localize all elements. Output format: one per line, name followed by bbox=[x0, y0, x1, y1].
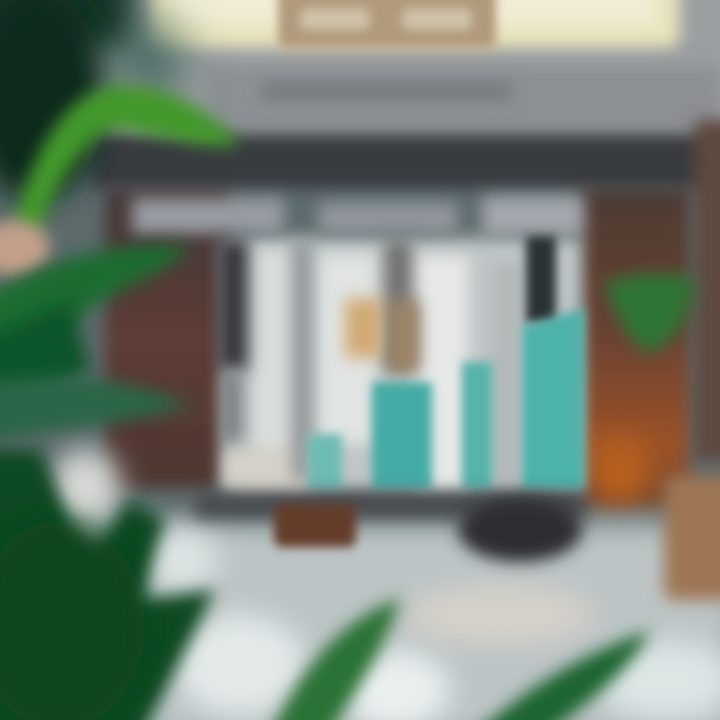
tan accent bbox=[345, 298, 420, 372]
panel header bars bbox=[132, 196, 584, 236]
ceiling: lit panel and grey soffit bbox=[0, 0, 720, 150]
plant: dark upper left foliage bbox=[0, 0, 180, 200]
floor: white cloudy surface bbox=[40, 448, 720, 720]
wood wall: right bbox=[578, 120, 720, 508]
wall plant: right bbox=[605, 273, 695, 352]
white columns bbox=[225, 250, 520, 494]
chart panel: white board with blurred bars bbox=[132, 196, 584, 494]
plant: bottom centre leaf bbox=[270, 598, 400, 720]
wood wall: left bbox=[105, 188, 230, 488]
teal bars bbox=[308, 308, 584, 490]
wooden box: right edge bbox=[664, 475, 720, 600]
plant: mid green leaves left bbox=[0, 244, 190, 445]
base objects: planters under the board bbox=[195, 492, 585, 562]
plant: bottom right leaf bbox=[470, 630, 650, 720]
skin-toned patch behind foliage bbox=[0, 220, 50, 276]
plant: large dark green foreground leaves bbox=[0, 450, 215, 720]
plant: bright lime leaf bbox=[14, 86, 240, 235]
dark beam bbox=[90, 134, 720, 188]
dark columns bbox=[218, 236, 556, 480]
